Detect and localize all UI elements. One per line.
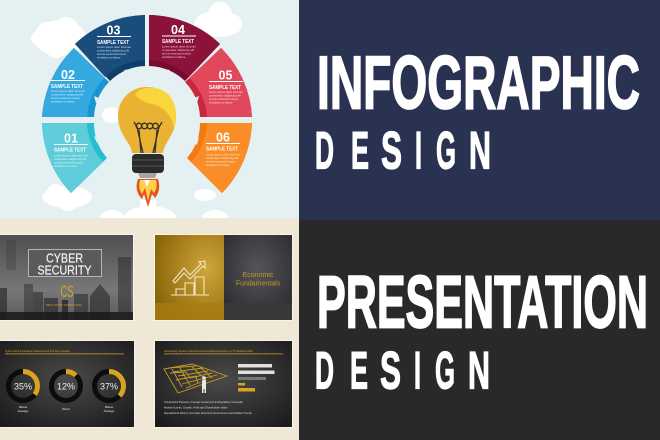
label 05: SAMPLE TEXT <box>209 85 241 91</box>
subheading letters: DESIGN: D <box>315 122 334 180</box>
segment 04: sed do eiusmod tempor <box>162 52 191 56</box>
label 03: SAMPLE TEXT <box>97 40 129 46</box>
subheading: DESIGN second: D <box>315 342 334 400</box>
label 01: SAMPLE TEXT <box>54 148 86 154</box>
segment 05: Lorem ipsum dolor sit amet <box>209 90 243 94</box>
panel: cream slides background <box>0 218 299 440</box>
icon: rocket flame <box>137 179 159 207</box>
subheading letters: DESIGN <box>315 122 491 180</box>
segment 02 <box>42 48 109 117</box>
icon: light bulb <box>118 87 176 178</box>
segment 03: Lorem ipsum dolor sit amet <box>97 45 131 49</box>
donut 12% <box>52 372 80 411</box>
number 06: 06 <box>216 130 230 144</box>
segment 06: incididunt ut labore <box>206 163 230 167</box>
segment 02: consectetur adipiscing elit <box>51 92 83 96</box>
subheading: DESIGN second: N <box>468 342 490 400</box>
segment 05: incididunt ut labore <box>209 100 233 104</box>
subheading: DESIGN second: I <box>414 342 421 400</box>
number 04: 04 <box>171 23 185 37</box>
segment 01: Lorem ipsum dolor sit amet <box>54 154 88 158</box>
donut 12%: Worst <box>62 407 70 411</box>
slide: cyber security: WEST POINT CONSULTING <box>46 303 82 307</box>
slide: donut charts: Cyber Risk Protection Assessment For Key Assets <box>5 349 70 353</box>
segment 05: sed do eiusmod tempor <box>209 97 238 101</box>
segment 03: sed do eiusmod tempor <box>97 52 126 56</box>
slide: maze <box>154 340 293 428</box>
logo: CS <box>60 282 74 301</box>
slide: donut charts <box>0 340 135 428</box>
segment 03 <box>75 15 145 81</box>
panel: infographic sample background <box>0 0 299 230</box>
donut 35%: 35% <box>14 382 32 392</box>
subheading: DESIGN second <box>315 342 490 400</box>
slide: maze: Assessing Impact of External Competitive Factors on IT Network Risk <box>164 349 253 353</box>
bars <box>238 364 274 392</box>
slide: maze: Reputational Risk in Uncertain Economic Environment and Market Trends <box>164 411 252 415</box>
slide: economic fundamentals <box>154 234 293 321</box>
segment 05 <box>185 48 252 117</box>
segment 04: Lorem ipsum dolor sit amet <box>162 44 196 48</box>
subheading letters: DESIGN: I <box>415 122 422 180</box>
segment 03: incididunt ut labore <box>97 56 121 60</box>
panel: presentation heading background <box>299 220 660 440</box>
panel: infographic heading background <box>299 0 660 220</box>
slide: cyber security: SECURITY <box>38 264 92 278</box>
segment 04: consectetur adipiscing elit <box>162 48 194 52</box>
segment 01: sed do eiusmod tempor <box>54 160 83 164</box>
segment 02: incididunt ut labore <box>51 100 75 104</box>
donut 37%: Average <box>104 409 115 413</box>
segment 06: Lorem ipsum dolor sit amet <box>206 152 240 156</box>
segment 02: sed do eiusmod tempor <box>51 96 80 100</box>
subheading letters: DESIGN: E <box>351 122 369 180</box>
segment 01: incididunt ut labore <box>54 164 78 168</box>
segment 06: consectetur adipiscing elit <box>206 156 238 160</box>
subheading: DESIGN second: E <box>350 342 368 400</box>
label 02: SAMPLE TEXT <box>51 84 83 90</box>
donut 35%: Average <box>18 409 29 413</box>
subheading: DESIGN second: S <box>380 342 401 400</box>
number 03: 03 <box>107 24 120 38</box>
slide: maze: Market Access, Growth, Profit and Shareholder Value <box>164 406 228 410</box>
slide: economic fundamentals: Fundamentals <box>236 280 281 288</box>
donut 35% <box>8 372 38 413</box>
donut 37%: 37% <box>100 382 118 392</box>
icon: growth chart <box>171 261 209 295</box>
segment 05: consectetur adipiscing elit <box>209 94 241 98</box>
donut 35%: Below <box>19 405 28 409</box>
donut 37%: Below <box>105 405 114 409</box>
number 01: 01 <box>64 132 78 146</box>
label 06: SAMPLE TEXT <box>206 146 238 152</box>
slide: economic fundamentals: Economic <box>243 272 274 279</box>
label 04: SAMPLE TEXT <box>162 39 194 45</box>
segment 02: Lorem ipsum dolor sit amet <box>51 89 85 93</box>
clouds <box>31 2 242 230</box>
slide: cyber security: CYBER <box>46 252 83 266</box>
subheading letters: DESIGN: N <box>469 122 491 180</box>
segment 06 <box>187 123 252 193</box>
skyline <box>0 240 131 320</box>
segment 04 <box>149 15 220 81</box>
number 02: 02 <box>61 68 75 82</box>
slide: cyber security <box>0 234 134 321</box>
segment 01: consectetur adipiscing elit <box>54 157 86 161</box>
subheading: DESIGN second: G <box>435 342 455 400</box>
donut 12%: 12% <box>57 382 75 392</box>
number 05: 05 <box>219 68 232 82</box>
title box <box>28 250 102 276</box>
donut 37% <box>94 372 124 413</box>
icon: figure <box>202 376 206 393</box>
segment 06: sed do eiusmod tempor <box>206 160 235 164</box>
segment 01 <box>42 123 107 193</box>
icon: maze <box>164 364 227 393</box>
segment 04: incididunt ut labore <box>162 55 186 59</box>
segment 03: consectetur adipiscing elit <box>97 48 129 52</box>
slide: maze: Competitive Pressure, Foreign Investment & Regulatory Oversight <box>164 400 243 404</box>
subheading letters: DESIGN: G <box>436 122 456 180</box>
subheading letters: DESIGN: S <box>381 122 402 180</box>
